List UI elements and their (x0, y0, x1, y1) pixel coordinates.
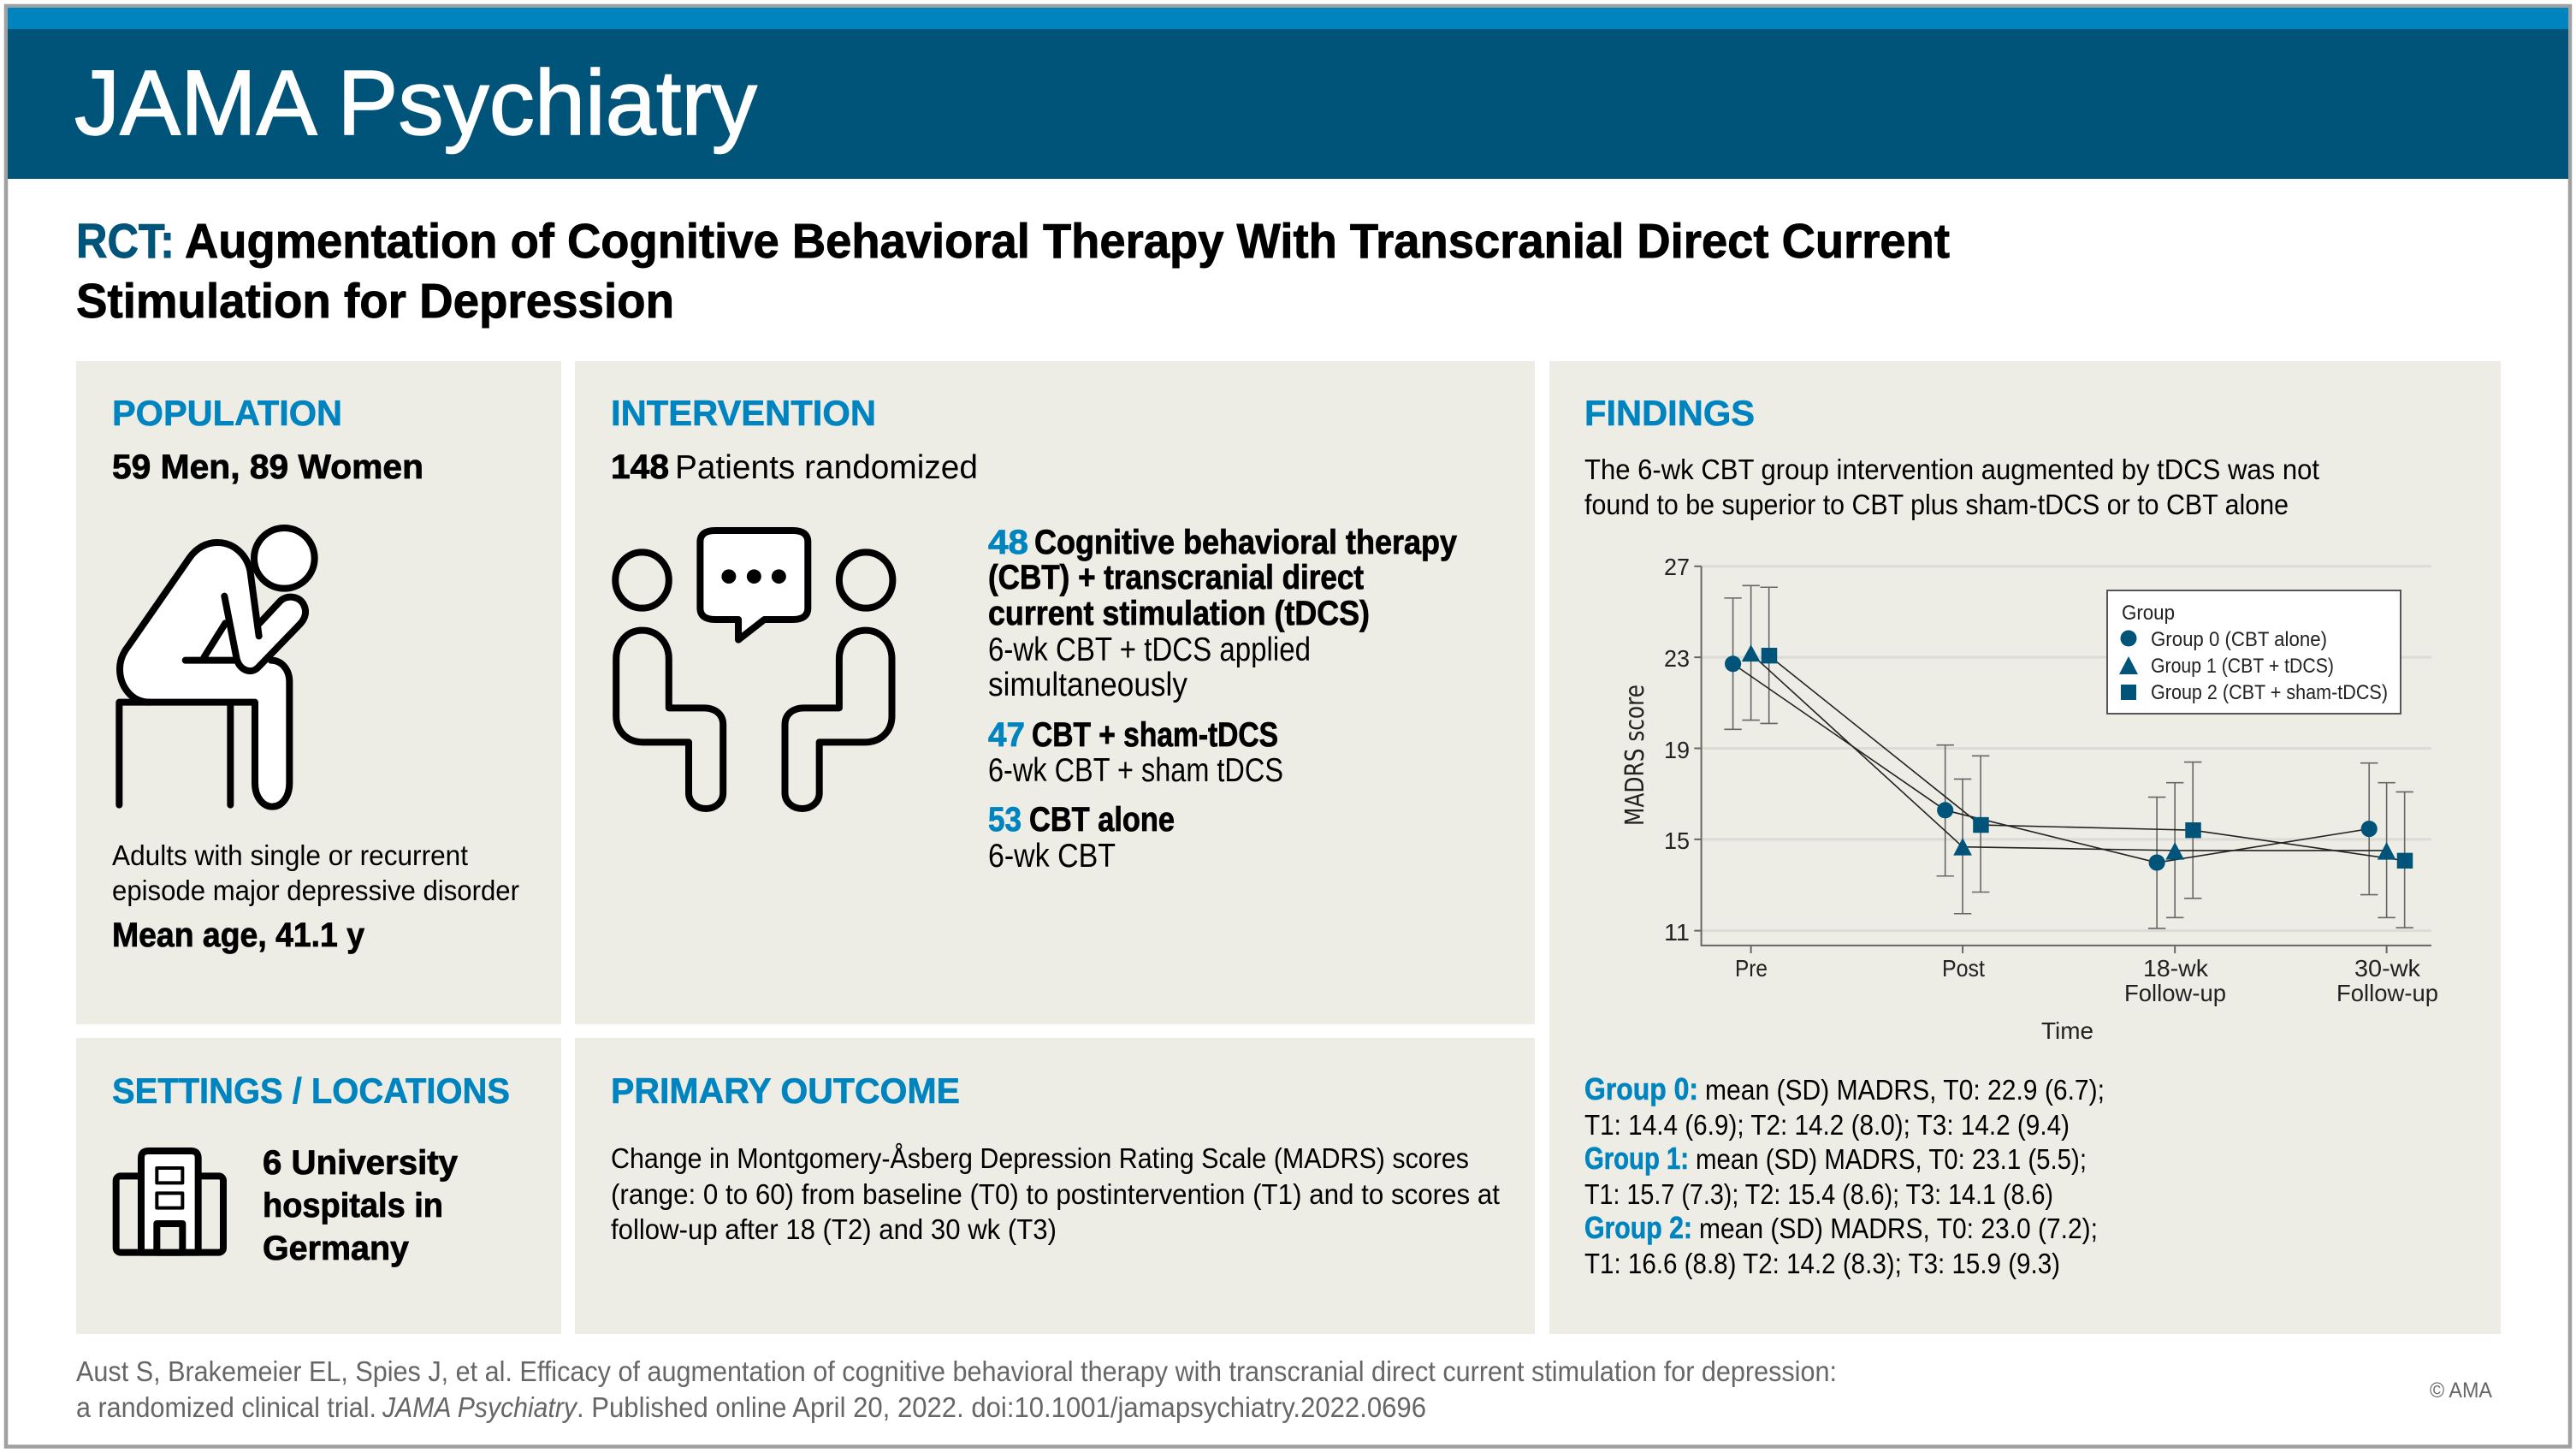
population description: episode major depressive disorder (112, 875, 519, 906)
citation (76, 1355, 1837, 1423)
title: Augmentation of Cognitive Behavioral Therapy With Transcranial Direct Current (185, 214, 1950, 269)
arm: CBT alone (988, 801, 1175, 875)
population description (112, 839, 519, 906)
arm: CBT + sham: CBT + sham-tDCS (1032, 716, 1278, 754)
data markers (1725, 644, 2413, 871)
x axis labels: 30-wk (2354, 955, 2421, 982)
panel: population (76, 361, 561, 1024)
arm: CBT + tDCS: 6-wk CBT + tDCS applied (988, 632, 1311, 668)
icon: hospital (116, 1151, 223, 1253)
x axis labels: Pre (1735, 955, 1768, 982)
heading: population: POPULATION (112, 393, 342, 433)
group results: T1: 15.7 (7.3); T2: 15.4 (8.6); T3: 14.1 (8.6) (1584, 1178, 2053, 1210)
arm: CBT + tDCS: current stimulation (tDCS) (988, 595, 1370, 632)
y axis tick labels: 19 (1664, 737, 1690, 763)
group results (1584, 1071, 2105, 1279)
legend: Group 2 (CBT + sham-tDCS) (2151, 681, 2388, 704)
title (76, 214, 1950, 329)
heading: primary outcome: PRIMARY OUTCOME (611, 1070, 960, 1111)
citation: JAMA Psychiatry (382, 1391, 578, 1423)
chart gridlines and axes (1694, 566, 2431, 953)
group results: Group 0: (1584, 1071, 1698, 1106)
group results: Group 2: (1584, 1210, 1692, 1245)
legend (2107, 590, 2401, 714)
randomized count: 148 (611, 448, 669, 486)
line chart: MADRS score over time (1620, 554, 2438, 1044)
outcome description (611, 1142, 1500, 1245)
icon: seated person (119, 528, 315, 807)
header band (8, 8, 2568, 179)
arm: CBT + sham: 47 (988, 716, 1025, 754)
y axis tick labels (1664, 554, 1690, 946)
panel: intervention (575, 361, 1535, 1024)
arm: CBT + sham (988, 716, 1283, 789)
settings text (263, 1144, 459, 1267)
title: RCT: (76, 214, 175, 269)
heading: settings: SETTINGS / LOCATIONS (112, 1070, 510, 1111)
panel: settings (76, 1038, 561, 1334)
arm: CBT + sham: 6-wk CBT + sham tDCS (988, 752, 1283, 789)
findings summary: The 6-wk CBT group intervention augmented by tDCS was not (1584, 454, 2319, 485)
heading: findings: FINDINGS (1584, 393, 1755, 433)
settings text: hospitals in (263, 1187, 443, 1225)
outcome description: follow-up after 18 (T2) and 30 wk (T3) (611, 1213, 1057, 1245)
copyright: © AMA (2430, 1379, 2492, 1403)
y axis tick labels: 23 (1664, 645, 1690, 672)
group results: Group 1: (1584, 1141, 1689, 1176)
group results: mean (SD) MADRS, T0: 22.9 (6.7); (1705, 1074, 2105, 1106)
findings summary (1584, 454, 2319, 520)
arm: CBT alone: CBT alone (1029, 801, 1175, 839)
citation: Aust S, Brakemeier EL, Spies J, et al. Efficacy of augmentation of cognitive behavioral therapy with transcranial direct current stimulation for depression: (76, 1355, 1837, 1387)
legend: Group 0 (CBT alone) (2151, 628, 2327, 651)
y axis tick labels: 27 (1664, 554, 1690, 580)
arm: CBT + tDCS: (CBT) + transcranial direct (988, 559, 1364, 596)
population counts: 59 Men, 89 Women (112, 448, 423, 486)
y axis title: MADRS score (1620, 685, 1650, 826)
x axis labels: 18-wk (2143, 955, 2209, 982)
x axis labels (1735, 955, 2438, 1006)
journal name: JAMA Psychiatry (74, 50, 757, 154)
x axis labels: Follow-up (2124, 980, 2226, 1006)
arm: CBT + tDCS: 48 (988, 524, 1028, 561)
arm: CBT + tDCS: Cognitive behavioral therapy (1034, 524, 1458, 561)
legend: Group (2122, 602, 2175, 625)
heading: intervention: INTERVENTION (611, 393, 876, 433)
y axis tick labels: 11 (1664, 919, 1690, 946)
title: Stimulation for Depression (76, 274, 674, 329)
y axis tick labels: 15 (1664, 827, 1690, 854)
error bars (1724, 585, 2413, 928)
citation: a randomized clinical trial. (76, 1391, 376, 1423)
arm: CBT + tDCS: simultaneously (988, 667, 1187, 703)
panel: findings (1549, 361, 2501, 1334)
group results: T1: 16.6 (8.8) T2: 14.2 (8.3); T3: 15.9 (9.3) (1584, 1248, 2060, 1279)
randomized count: Patients randomized (675, 449, 978, 486)
arm: CBT alone: 53 (988, 801, 1022, 839)
mean age: Mean age, 41.1 y (112, 916, 365, 954)
outcome description: Change in Montgomery-Åsberg Depression Rating Scale (MADRS) scores (611, 1142, 1469, 1174)
legend: Group 1 (CBT + tDCS) (2151, 655, 2334, 678)
population description: Adults with single or recurrent (112, 839, 468, 871)
arm: CBT alone: 6-wk CBT (988, 838, 1116, 875)
group results: mean (SD) MADRS, T0: 23.1 (5.5); (1696, 1143, 2087, 1175)
x axis labels: Follow-up (2336, 980, 2438, 1006)
x axis title: Time (2041, 1017, 2093, 1044)
outcome description: (range: 0 to 60) from baseline (T0) to postintervention (T1) and to scores at (611, 1178, 1500, 1210)
icon: two people talking (615, 531, 892, 809)
findings summary: found to be superior to CBT plus sham-tDCS or to CBT alone (1584, 489, 2289, 520)
data lines (1733, 654, 2405, 863)
settings text: Germany (263, 1230, 410, 1267)
group results: mean (SD) MADRS, T0: 23.0 (7.2); (1699, 1213, 2098, 1244)
group results: T1: 14.4 (6.9); T2: 14.2 (8.0); T3: 14.2 (9.4) (1584, 1109, 2070, 1141)
citation: . Published online April 20, 2022. doi:10.1001/jamapsychiatry.2022.0696 (577, 1391, 1426, 1423)
panel: primary outcome (575, 1038, 1535, 1334)
x axis labels: Post (1942, 955, 1985, 982)
settings text: 6 University (263, 1144, 459, 1182)
arm: CBT + tDCS (988, 524, 1458, 703)
